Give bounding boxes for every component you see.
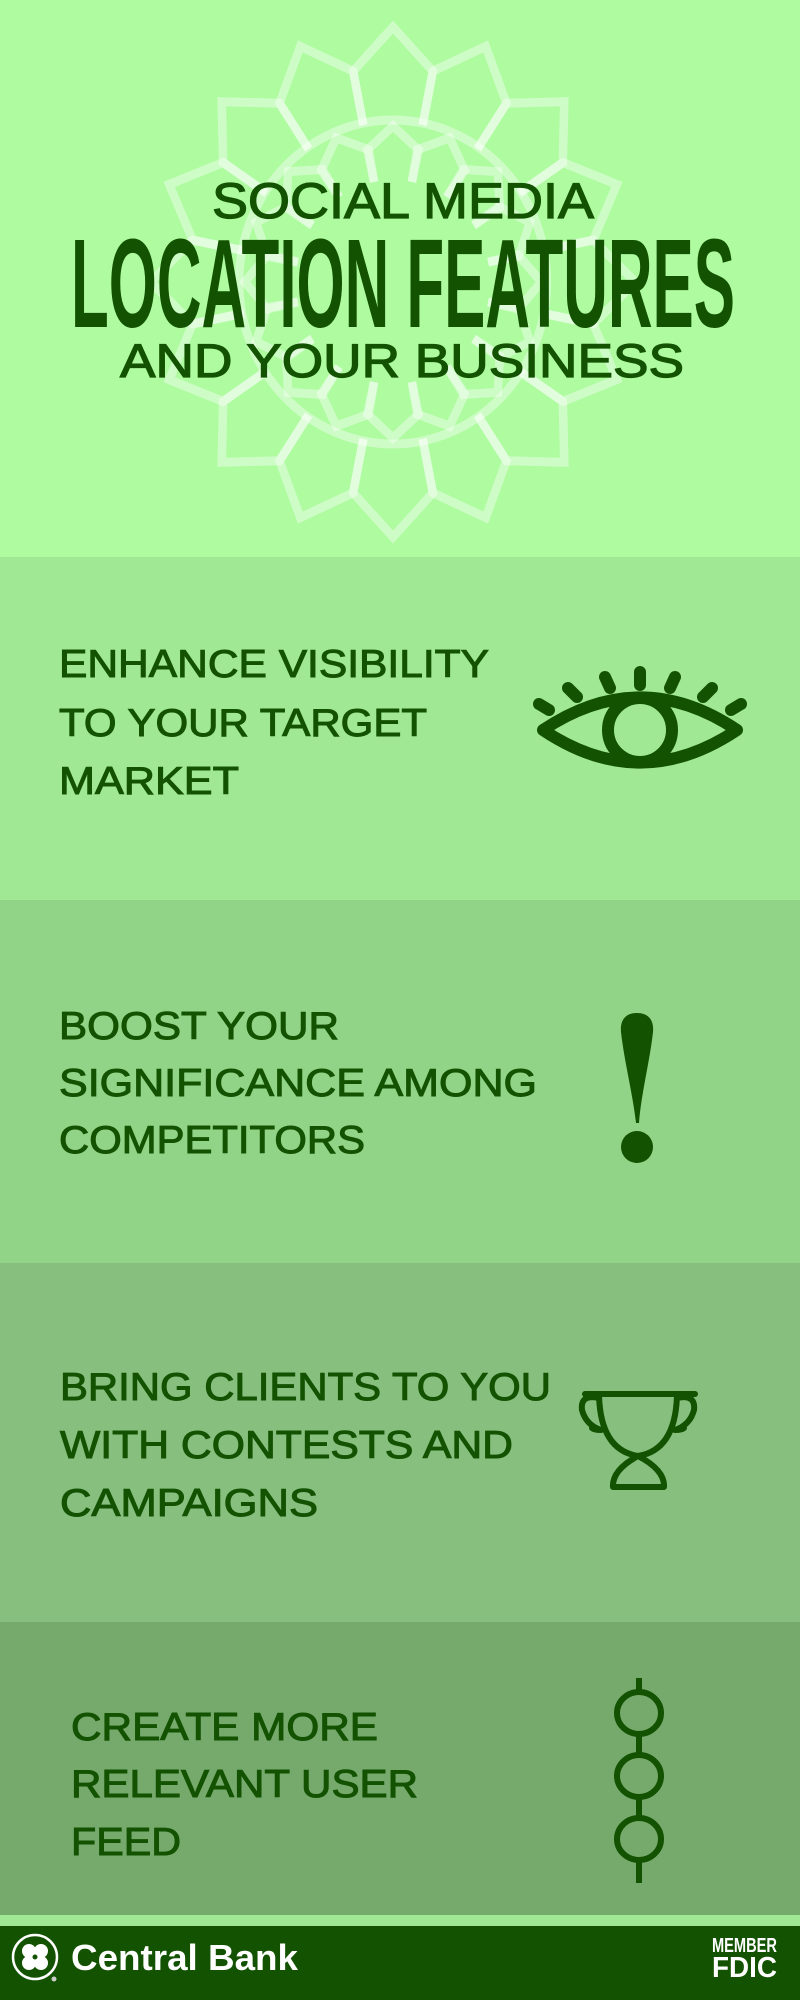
text: enhance visibility — [59, 643, 489, 803]
text: boost significance: SIGNIFICANCE AMONG — [59, 1062, 537, 1105]
icon: eye — [539, 672, 741, 762]
text: bring clients — [60, 1366, 551, 1525]
text: boost significance — [59, 1005, 537, 1162]
text: bring clients: WITH CONTESTS AND — [60, 1424, 513, 1467]
text: enhance visibility: TO YOUR TARGET — [59, 702, 427, 745]
title — [71, 173, 735, 387]
icon: chain — [617, 1678, 661, 1883]
panel: enhance visibility — [0, 557, 800, 900]
icon: trophy — [582, 1394, 695, 1487]
text: relevant feed — [71, 1706, 418, 1864]
text: boost significance: BOOST YOUR — [59, 1005, 339, 1048]
footer — [0, 1926, 800, 2000]
title: AND YOUR BUSINESS — [120, 334, 684, 387]
icon: exclamation — [621, 1013, 653, 1163]
text: bring clients: CAMPAIGNS — [60, 1482, 318, 1525]
text: enhance visibility: ENHANCE VISIBILITY — [59, 643, 489, 686]
icon: clover logo — [13, 1935, 57, 1982]
title: SOCIAL MEDIA — [212, 173, 595, 229]
text: member fdic — [712, 1935, 777, 1984]
text: relevant feed: FEED — [71, 1821, 181, 1864]
panel: relevant feed — [0, 1622, 800, 1915]
text: boost significance: COMPETITORS — [59, 1119, 365, 1162]
decorative mandala — [151, 27, 635, 537]
text: member fdic: FDIC — [712, 1952, 777, 1984]
text: relevant feed: CREATE MORE — [71, 1706, 378, 1749]
text: enhance visibility: MARKET — [59, 760, 239, 803]
panel: bring clients — [0, 1263, 800, 1622]
text: bring clients: BRING CLIENTS TO YOU — [60, 1366, 551, 1409]
panel: boost significance — [0, 900, 800, 1263]
header panel background — [0, 0, 800, 557]
text: relevant feed: RELEVANT USER — [71, 1763, 418, 1806]
text: central bank: Central Bank — [71, 1937, 299, 1978]
text: member fdic: MEMBER — [712, 1935, 777, 1957]
